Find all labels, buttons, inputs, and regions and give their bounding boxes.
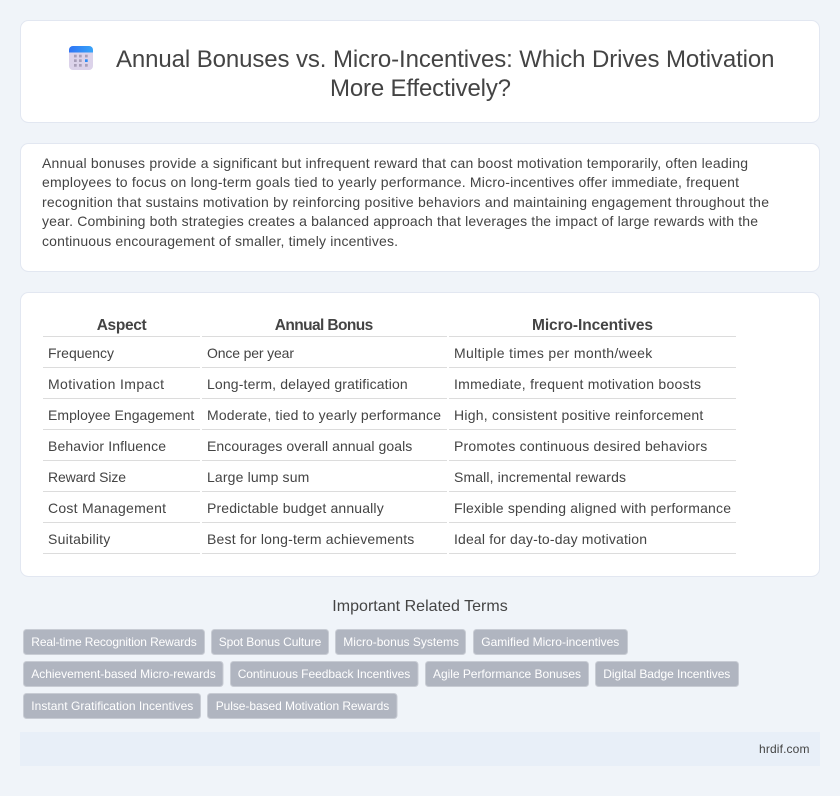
row: cost management: Flexible spending aligned with performance <box>454 500 731 516</box>
row: reward size: Large lump sum <box>207 469 309 485</box>
text block: introduction <box>42 155 769 249</box>
text block: introduction: year. Combining both strategies creates a balanced approach that leverages the impact of large rewards with the <box>42 213 758 229</box>
row: behavior influence <box>48 438 707 454</box>
row: motivation impact: Motivation Impact <box>48 376 164 392</box>
text block: introduction: Annual bonuses provide a significant but infrequent reward that can boost motivation temporarily, often leading <box>42 155 748 171</box>
related term tags: Spot Bonus Culture <box>219 635 322 649</box>
text block: introduction: recognition that sustains motivation by reinforcing positive behaviors and maintaining engagement throughout the <box>42 194 769 210</box>
panel: introduction <box>20 144 820 272</box>
row: reward size: Small, incremental rewards <box>454 469 626 485</box>
panel: header <box>20 20 820 122</box>
related term tags: Instant Gratification Incentives <box>31 699 193 713</box>
row: cost management: Cost Management <box>48 500 166 516</box>
row: reward size <box>48 469 626 485</box>
row: frequency: Frequency <box>48 345 114 361</box>
related term tags: Micro-bonus Systems <box>343 635 459 649</box>
row: cost management: Predictable budget annually <box>207 500 384 516</box>
row: employee engagement: Moderate, tied to yearly performance <box>207 407 441 423</box>
icon: calendar <box>69 46 93 70</box>
footer: hrdif.com <box>759 742 810 756</box>
table header row <box>97 317 653 334</box>
row: frequency: Multiple times per month/week <box>454 345 653 361</box>
row: suitability: Suitability <box>48 531 110 547</box>
related term tags: Achievement-based Micro-rewards <box>31 667 216 681</box>
text block: introduction: continuous encouragement of smaller, timely incentives. <box>42 233 398 249</box>
related term tags: Pulse-based Motivation Rewards <box>216 699 389 713</box>
row: employee engagement <box>48 407 703 423</box>
row: frequency: Once per year <box>207 345 294 361</box>
text block: introduction: employees to focus on long-term goals tied to yearly performance. Micro-incentives offer immediate, frequent <box>42 174 739 190</box>
comparison table <box>43 317 736 554</box>
title <box>116 46 774 102</box>
related term tags: Continuous Feedback Incentives <box>238 667 410 681</box>
footer <box>20 732 820 766</box>
table header row: Micro-Incentives <box>532 317 653 334</box>
row: reward size: Reward Size <box>48 469 126 485</box>
row: suitability: Ideal for day-to-day motivation <box>454 531 647 547</box>
panel: comparison table <box>20 292 820 576</box>
related term tags: Agile Performance Bonuses <box>433 667 581 681</box>
title: Annual Bonuses vs. Micro-Incentives: Which Drives Motivation <box>116 46 774 73</box>
row: motivation impact <box>48 376 701 392</box>
row: employee engagement: High, consistent positive reinforcement <box>454 407 703 423</box>
row: motivation impact: Immediate, frequent motivation boosts <box>454 376 701 392</box>
row: employee engagement: Employee Engagement <box>48 407 194 423</box>
table header row: Annual Bonus <box>275 317 373 334</box>
title: More Effectively? <box>330 75 511 102</box>
related term tags: Gamified Micro-incentives <box>481 635 619 649</box>
row: behavior influence: Encourages overall annual goals <box>207 438 412 454</box>
row: frequency <box>48 345 653 361</box>
related term tags: Digital Badge Incentives <box>603 667 730 681</box>
row: suitability: Best for long-term achievements <box>207 531 414 547</box>
row: motivation impact: Long-term, delayed gratification <box>207 376 408 392</box>
row: behavior influence: Promotes continuous desired behaviors <box>454 438 707 454</box>
related term tags <box>24 630 738 718</box>
heading: related terms: Important Related Terms <box>332 598 508 615</box>
related term tags: Real-time Recognition Rewards <box>31 635 197 649</box>
row: behavior influence: Behavior Influence <box>48 438 166 454</box>
row: cost management <box>48 500 731 516</box>
table header row: Aspect <box>97 317 147 334</box>
row: suitability <box>48 531 647 547</box>
